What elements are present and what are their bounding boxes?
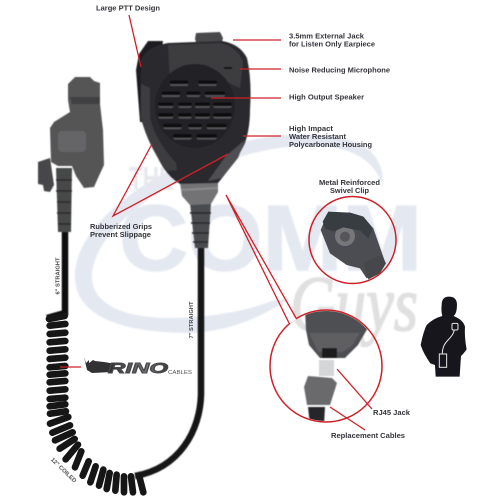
label: swivel line 2: Swivel Clip <box>330 186 370 195</box>
RJ45 plug <box>319 360 334 376</box>
speaker dome <box>155 64 235 148</box>
RINO wordmark: RINO <box>108 360 169 377</box>
cable boot <box>304 376 337 405</box>
lower rubber grip <box>208 140 245 181</box>
inset: RJ45 connection <box>270 310 382 425</box>
line: RINO cables <box>60 366 81 368</box>
line: housing <box>243 135 281 137</box>
line: replacement cables <box>330 407 365 430</box>
left radio connector <box>38 77 104 318</box>
label: microphone: Noise Reducing Microphone <box>289 66 390 74</box>
watermark word THE: THE <box>129 160 174 197</box>
line: rubberized grips <box>113 144 228 216</box>
label: RJ45: RJ45 Jack <box>373 408 410 417</box>
watermark swoosh <box>75 135 383 333</box>
watermark word Guys: Guys <box>290 260 418 347</box>
rhino icon <box>84 357 116 373</box>
PTT button <box>136 41 163 122</box>
RJ45 circle <box>270 310 382 422</box>
label: swivel line 1: Metal Reinforced <box>319 178 380 187</box>
line: microphone <box>240 68 281 70</box>
watermark: The Comm Guys logo <box>75 135 422 347</box>
label: jack line 2: for Listen Only Earpiece <box>289 40 375 48</box>
labels <box>49 4 410 485</box>
line: to RJ45 inset <box>226 195 296 323</box>
line: PTT <box>129 15 141 67</box>
top swivel button <box>195 32 223 42</box>
front upper panel <box>168 43 243 88</box>
label: PTT: Large PTT Design <box>96 4 160 12</box>
line: speaker <box>211 97 281 99</box>
RJ45 photo <box>304 310 372 425</box>
rubber collar <box>180 181 218 205</box>
label: 12 inch coiled: 12" COILED <box>49 457 77 485</box>
label: housing line 3: Polycarbonate Housing <box>289 140 372 149</box>
speaker grille slots <box>160 82 230 138</box>
label: housing line 2: Water Resistant <box>289 132 347 141</box>
label: grips line 2: Prevent Slippage <box>90 230 151 239</box>
label: jack line 1: 3.5mm External Jack <box>289 32 364 40</box>
label: housing line 1: High Impact <box>289 124 334 133</box>
label: grips line 1: Rubberized Grips <box>90 222 152 231</box>
red callout lines <box>60 15 372 430</box>
inset: swivel clip <box>309 196 396 284</box>
microphone base <box>305 310 372 358</box>
label: 7 inch straight: 7" STRAIGHT <box>189 301 195 338</box>
connector cable <box>47 225 65 318</box>
CABLES word: CABLES <box>168 370 192 376</box>
coiled cord <box>49 316 143 492</box>
watermark word COMM: COMM <box>119 186 422 290</box>
swivel clip circle <box>309 196 396 284</box>
connector body <box>50 77 104 188</box>
microphone slit <box>224 67 232 69</box>
swivel clip photo <box>321 212 386 279</box>
long cable <box>135 245 201 476</box>
RINO cables logo <box>84 357 192 377</box>
wearer silhouette <box>421 297 467 377</box>
body silhouette <box>421 297 467 377</box>
connector side tab <box>38 158 54 192</box>
jack opening <box>322 348 337 358</box>
speaker microphone <box>135 32 251 476</box>
label: speaker: High Output Speaker <box>289 92 364 102</box>
line: jack <box>233 39 281 41</box>
label: replacement: Replacement Cables <box>331 431 405 440</box>
connector recessed label area <box>58 131 86 152</box>
line: RJ45 jack <box>337 369 372 409</box>
side rubber grip <box>141 84 177 171</box>
label: 6 inch straight: 6" STRAIGHT <box>56 257 62 294</box>
connector strain relief <box>56 168 72 232</box>
strain relief <box>190 203 211 248</box>
worn cord and microphone <box>439 323 458 367</box>
replacement cable <box>308 407 325 425</box>
housing <box>140 41 251 184</box>
